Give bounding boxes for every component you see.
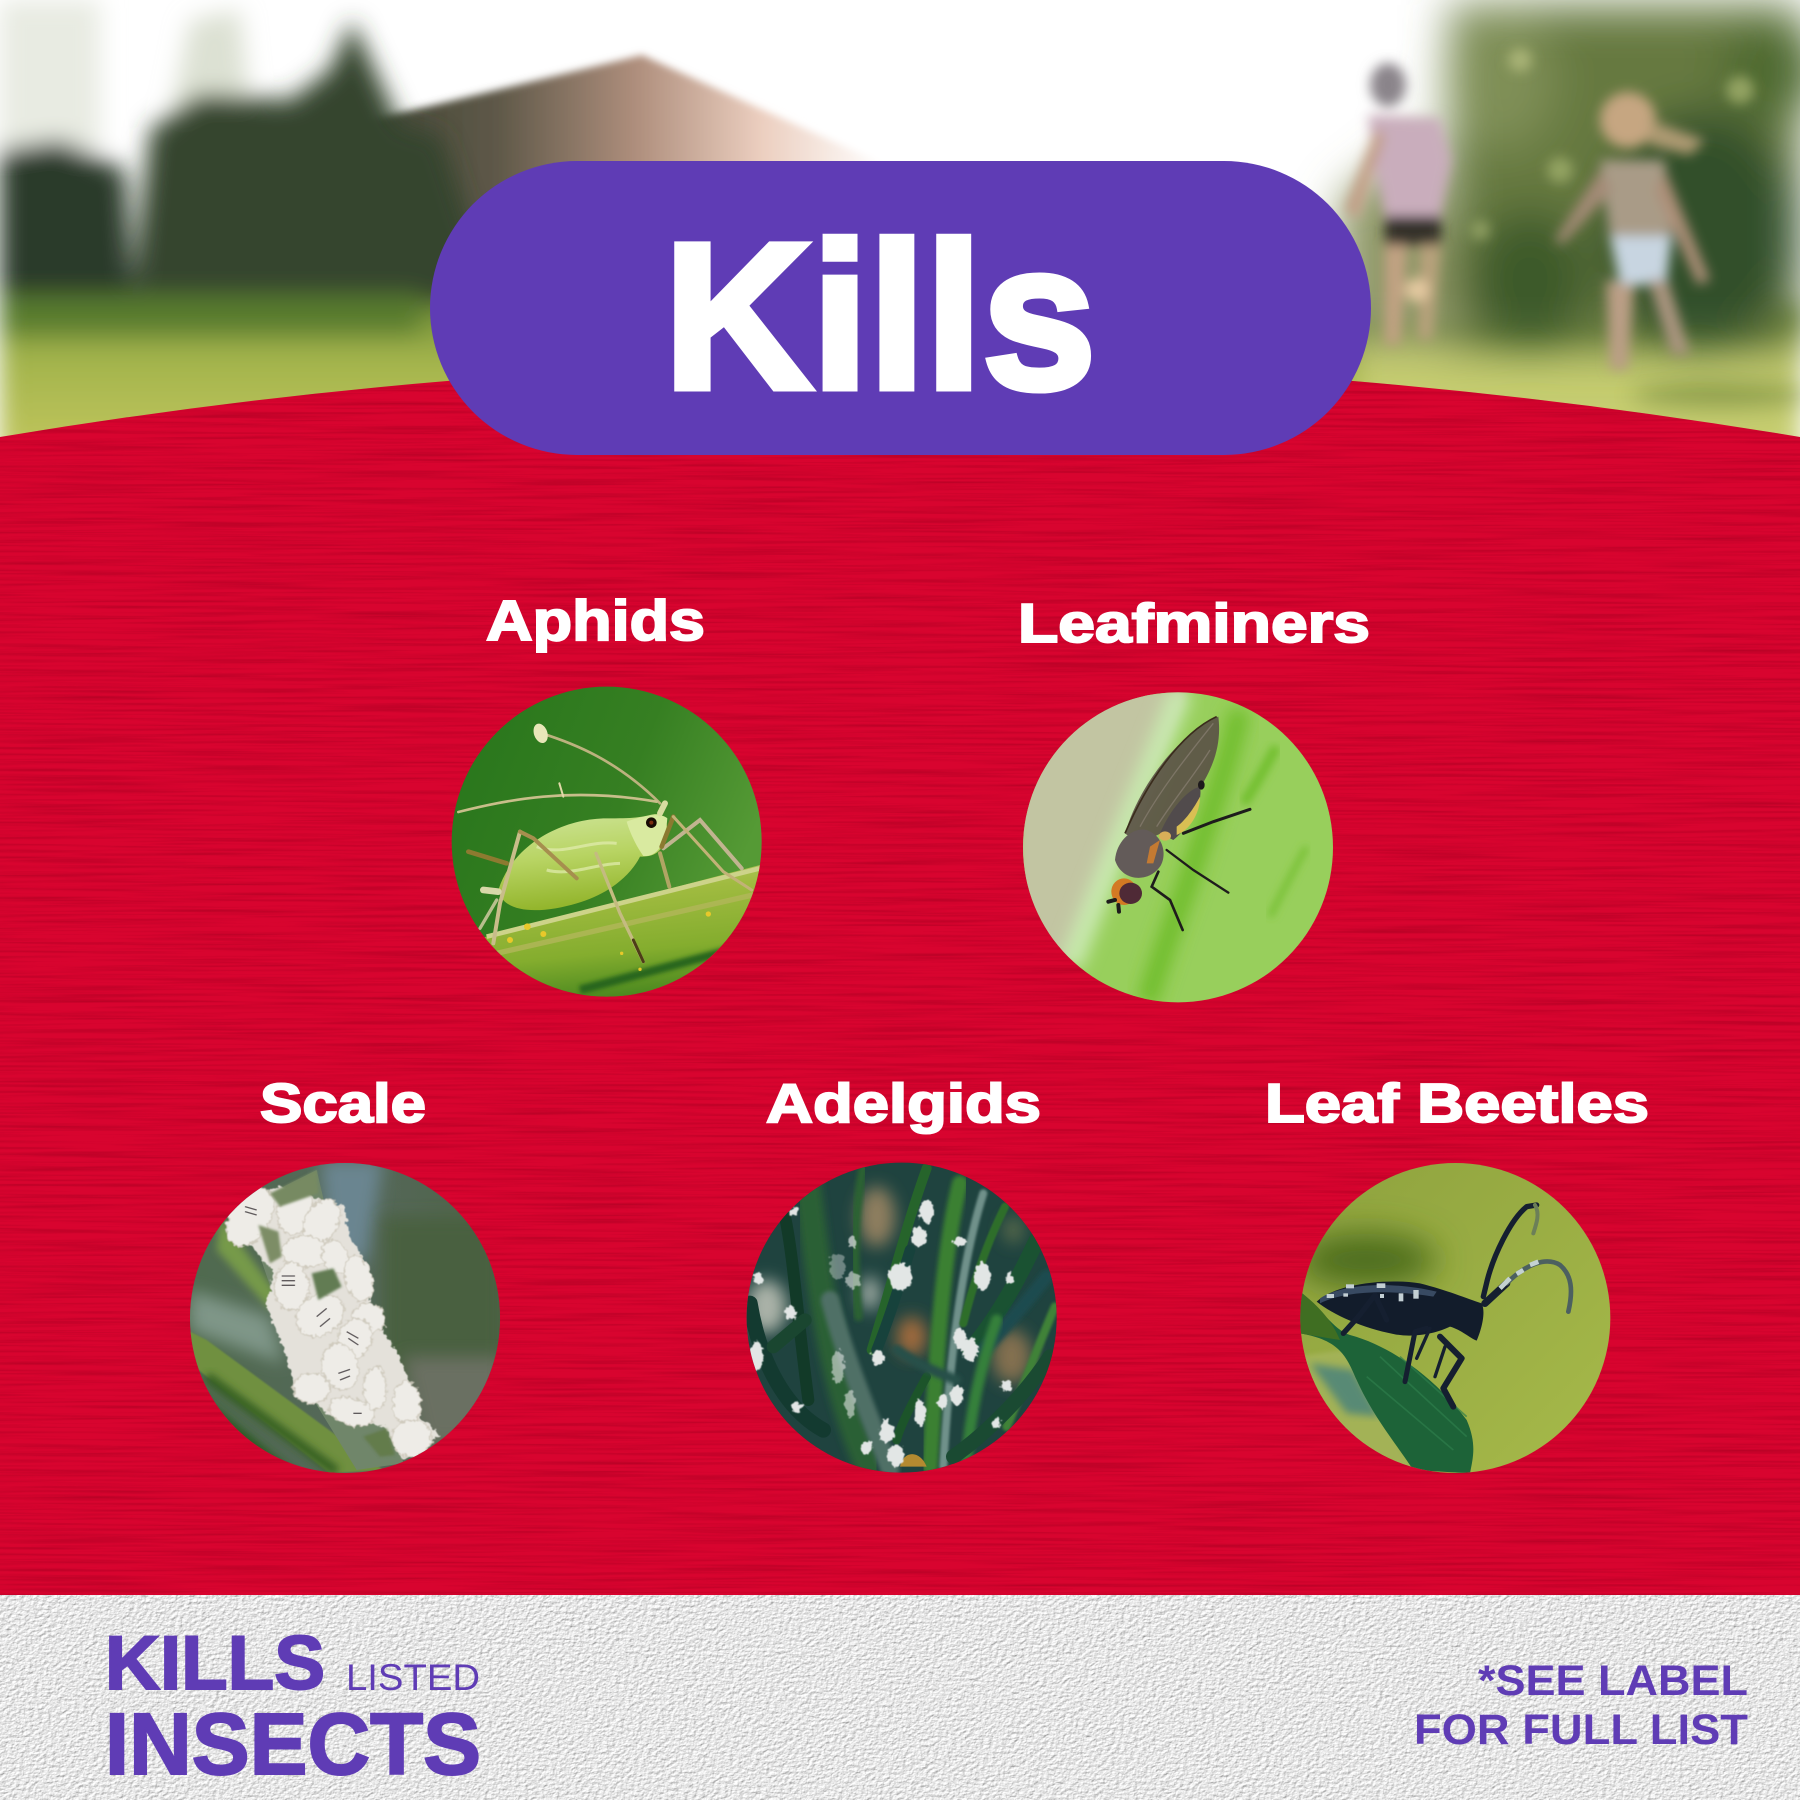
footer badge: kills listed insects: KILLS	[105, 1621, 325, 1706]
panel: Adelgids	[743, 1072, 1060, 1477]
footer note: see label: FOR FULL LIST	[1414, 1706, 1748, 1754]
footer note: see label	[1414, 1657, 1748, 1754]
label: Leafminers: Leafminers	[1018, 592, 1370, 654]
label: Scale: Scale	[260, 1072, 426, 1134]
label: Adelgids: Adelgids	[766, 1072, 1041, 1134]
footer badge: kills listed insects: LISTED	[346, 1657, 480, 1698]
child running left	[1345, 63, 1452, 345]
panel: Leaf Beetles	[1265, 1072, 1649, 1480]
label: Leaf Beetles: Leaf Beetles	[1265, 1072, 1649, 1134]
footer badge: kills listed insects: INSECTS	[105, 1696, 481, 1793]
photo: white scale insects on a stem	[187, 1160, 503, 1477]
title pill	[430, 161, 1371, 455]
footer badge: kills listed insects	[105, 1621, 481, 1793]
photo: aphid on a stem	[450, 685, 763, 1003]
panel: textured footer	[0, 1595, 1800, 1800]
footer note: see label: *SEE LABEL	[1478, 1657, 1748, 1705]
title text: Kills	[664, 201, 1096, 433]
child running right	[1555, 92, 1710, 370]
label: Aphids: Aphids	[486, 589, 705, 653]
panel: Scale	[187, 1072, 503, 1477]
panel: Aphids	[450, 589, 763, 1003]
panel: Leafminers	[1018, 592, 1370, 1007]
photo: adelgids on conifer needles	[743, 1160, 1060, 1477]
photo: long-horned beetle on a leaf	[1297, 1160, 1617, 1480]
panel: red textured field	[0, 362, 1800, 1595]
background photo: family lawn scene	[0, 0, 1800, 460]
photo: leafminer fly on a leaf	[1020, 690, 1337, 1007]
